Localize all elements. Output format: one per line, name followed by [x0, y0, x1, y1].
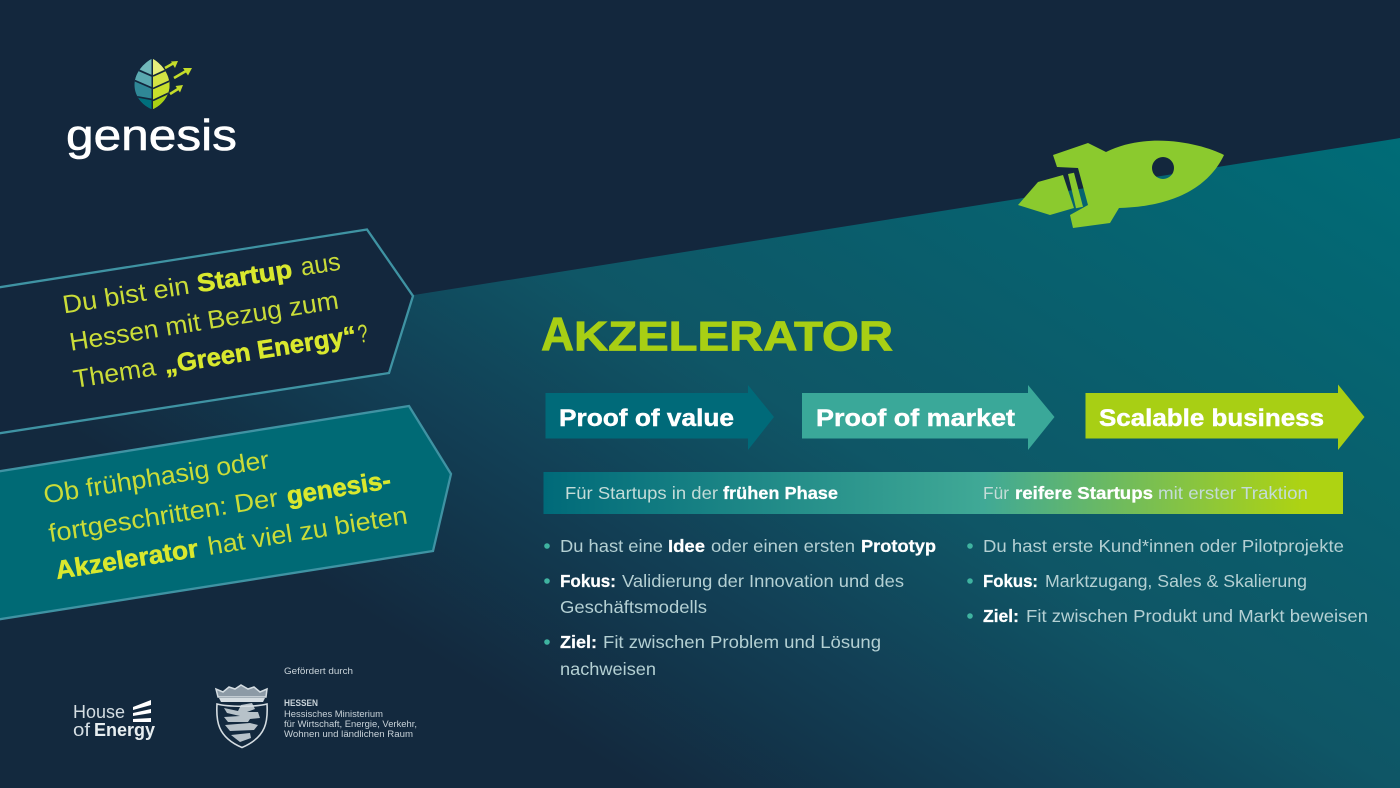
list: mature stage: Fokus: [983, 571, 1038, 591]
logo: House of Energy: House [73, 701, 125, 722]
text: startup question [60, 245, 370, 394]
gradient bar: startup phases: reifere Startups [1015, 483, 1153, 503]
list: early stage: Fokus: [560, 571, 616, 591]
list: mature stage: Marktzugang, Sales & Skalierung [1045, 571, 1307, 591]
list: mature stage: Ziel: [983, 606, 1019, 626]
gradient bar: startup phases: Für [983, 483, 1009, 503]
arrow: Proof of market [802, 385, 1054, 450]
text: accelerator statement [41, 426, 410, 585]
text: startup question: Thema [71, 353, 159, 394]
logo: House of Energy: of [73, 719, 91, 740]
arrow: Scalable business: Scalable business [1099, 405, 1324, 432]
gradient bar: startup phases: Für Startups in der [565, 483, 718, 503]
list: early stage: Validierung der Innovation und des [622, 571, 904, 591]
text: startup question: Hessen mit Bezug zum [67, 287, 341, 357]
text: startup question: Du bist ein [61, 272, 191, 319]
list: early stage: oder einen ersten [711, 536, 855, 556]
icon: Hessen coat of arms [216, 685, 267, 748]
logo: House of Energy: Energy [94, 719, 156, 740]
logo: genesis [66, 55, 237, 160]
text: startup question: Startup [195, 255, 294, 298]
list: mature stage: Du hast erste Kund*innen oder Pilotprojekte [983, 536, 1344, 556]
panel: accelerator statement [0, 406, 451, 620]
list: early stage: Fit zwischen Problem und Lösung [603, 632, 881, 652]
text: accelerator statement: hat viel zu bieten [206, 502, 410, 561]
text: funding note [284, 666, 417, 740]
icon: leaf with arrows [134, 59, 192, 109]
gradient bar: startup phases: mit erster Traktion [1158, 483, 1308, 503]
gradient bar: startup phases: frühen Phase [723, 483, 838, 503]
text: startup question: ? [356, 320, 370, 349]
gradient bar: startup phases [544, 472, 1343, 514]
text: accelerator statement: fortgeschritten: Der [47, 484, 281, 548]
text: accelerator statement: Akzelerator [54, 535, 200, 585]
heading: Akzelerator: KZELERATOR [574, 312, 893, 360]
text: accelerator statement: Ob frühphasig oder [42, 446, 272, 509]
arrow: Proof of market: Proof of market [816, 405, 1015, 432]
text: funding note: Gefördert durch [284, 666, 353, 677]
text: funding note: HESSEN [284, 698, 318, 708]
text: funding note: für Wirtschaft, Energie, Verkehr, [284, 719, 417, 730]
list: mature stage: Fit zwischen Produkt und Markt beweisen [1026, 606, 1368, 626]
text: funding note: Hessisches Ministerium [284, 709, 383, 720]
text: startup question: „Green Energy“ [162, 322, 358, 380]
list: early stage: nachweisen [560, 659, 656, 679]
list: early stage: Du hast eine [560, 536, 663, 556]
list: early stage: Idee [668, 536, 705, 556]
arrow: Proof of value [546, 385, 774, 450]
icon: rocket [1018, 141, 1224, 228]
logo: House of Energy [73, 700, 156, 740]
heading: Akzelerator: A [541, 308, 574, 360]
list: early stage: Prototyp [861, 536, 936, 556]
list: early stage: Geschäftsmodells [560, 597, 707, 617]
list: early stage [544, 536, 936, 679]
panel: startup question [0, 230, 413, 434]
text: funding note: Wohnen und ländlichen Raum [284, 729, 413, 740]
text: startup question: aus [299, 248, 342, 282]
text: accelerator statement: genesis- [285, 466, 393, 510]
arrow: Proof of value: Proof of value [559, 405, 734, 432]
logo wordmark: genesis [66, 111, 237, 160]
list: early stage: Ziel: [560, 632, 597, 652]
list: mature stage [967, 536, 1368, 626]
arrow: Scalable business [1086, 384, 1364, 450]
